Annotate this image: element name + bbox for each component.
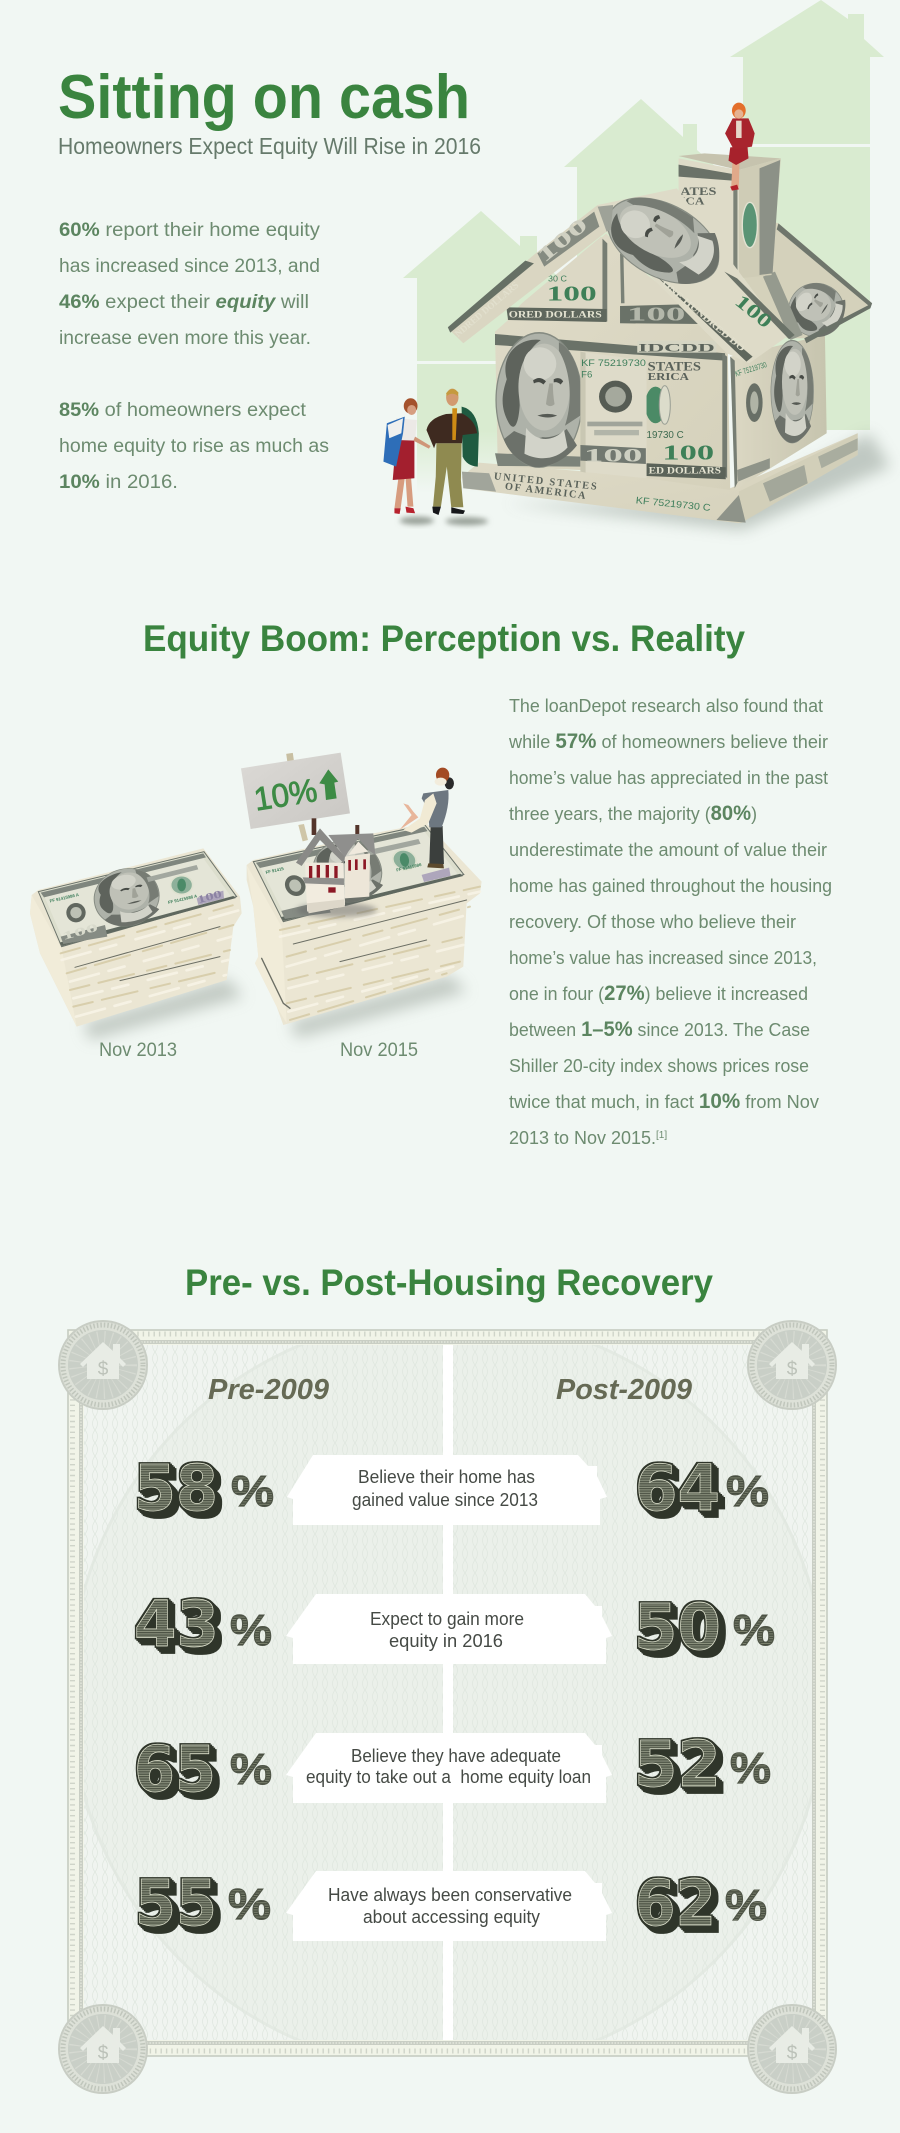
stat: post 62%: 62 — [635, 1867, 716, 1940]
text block: equity statistics: increase even more this year. — [59, 328, 311, 349]
sign: 10% up — [241, 753, 350, 841]
house front wall: 19730 C — [647, 430, 684, 441]
gable bills: 100 — [627, 304, 685, 326]
right roof slab with Franklin — [592, 180, 795, 363]
house front wall: STATES — [648, 360, 701, 374]
stat: post 50%: 50 — [634, 1591, 721, 1664]
stat: post 64%: % — [726, 1467, 769, 1516]
chimney: ICA — [680, 197, 705, 208]
house door bill: KF 75219730 — [581, 358, 646, 369]
stat: pre 58%: 58 — [134, 1452, 218, 1525]
stat: pre 55%: % — [228, 1880, 271, 1929]
corner medallion top left: $ — [98, 1359, 109, 1380]
row 1: gained value — [134, 1452, 769, 1525]
heading: pre vs post housing recovery: Pre- vs. Post-Housing Recovery — [185, 1262, 713, 1303]
text block: equity statistics: 85% of homeowners expect — [59, 400, 307, 421]
miniature house — [296, 818, 377, 917]
house front wall — [495, 233, 730, 490]
panel: certificate frame comparison — [59, 1315, 836, 2093]
corner medallion top right — [748, 1321, 836, 1409]
column heading: Pre-2009: Pre-2009 — [208, 1374, 329, 1406]
gable bills: 30 C — [548, 273, 568, 283]
stat: post 62% — [635, 1867, 767, 1940]
label tag — [286, 1594, 612, 1664]
stat: pre 55% — [135, 1867, 271, 1940]
text block: loanDepot research: Shiller 20-city index shows prices rose — [509, 1055, 809, 1076]
certificate border — [68, 1330, 827, 2056]
label tag: Have always been conservative — [328, 1885, 572, 1905]
text block: loanDepot research: 2013 to Nov 2015. — [509, 1127, 656, 1148]
sign: 10% up: 10% — [251, 771, 320, 818]
text block: equity statistics: 60% report their home equity — [59, 220, 321, 241]
corner medallion bottom left: $ — [98, 2043, 109, 2064]
illustration: Nov 2013 money stack — [30, 848, 243, 1040]
illustration: Nov 2013 money stack: FF 91415986 A — [167, 893, 199, 905]
stat: post 52% — [634, 1728, 771, 1801]
corner medallion bottom right — [748, 2005, 836, 2093]
row 3: adequate equity — [134, 1728, 771, 1806]
stat: post 52%: % — [730, 1744, 771, 1793]
illustration: Nov 2013 money stack: 100 — [196, 889, 223, 906]
text block: equity statistics: has increased since 2013, and — [59, 256, 320, 277]
text block: loanDepot research: home’s value has appreciated in the past — [509, 767, 828, 788]
stat: post 64% — [635, 1452, 769, 1525]
house side wall: KF 75219730 — [734, 360, 768, 379]
Franklin portrait on front wall — [496, 333, 582, 467]
illustration: Nov 2015 money stack with house, sign and couple: FF 91415 — [265, 866, 285, 875]
house door bill — [580, 352, 647, 478]
right roof slab with Franklin: 100 — [730, 291, 777, 333]
stat: pre 43% — [134, 1588, 272, 1661]
gable bills: 100 — [547, 282, 597, 306]
guilloche panel — [84, 1345, 812, 2040]
corner medallion bottom left — [59, 2005, 147, 2093]
label tag: about accessing equity — [363, 1907, 540, 1927]
text block: equity statistics: home equity to rise as much as — [59, 436, 329, 457]
label tag: equity to take out a home equity loan — [306, 1767, 591, 1787]
illustration: house made of dollar bills — [383, 103, 890, 530]
text block: loanDepot research: while 57% of homeowners believe their — [508, 730, 828, 753]
text block: loanDepot research: home’s value has increased since 2013, — [509, 947, 817, 968]
house base slab — [462, 433, 858, 523]
label tag: Expect to gain more — [370, 1609, 524, 1629]
row 4: conservative — [135, 1867, 767, 1941]
centre divider — [443, 1345, 453, 2040]
label tag: gained value since 2013 — [352, 1490, 538, 1510]
text block: loanDepot research: between 1–5% since 2013. The Case — [509, 1018, 810, 1041]
text block: loanDepot research: [1] — [656, 1130, 667, 1141]
stat: post 50%: % — [733, 1606, 775, 1655]
corner medallion bottom right: $ — [787, 2043, 798, 2064]
stat: pre 65% — [134, 1733, 272, 1806]
house door bill: F6 — [581, 369, 592, 380]
illustration: Nov 2015 money stack with house, sign and couple — [241, 753, 482, 1038]
house side wall — [730, 335, 827, 490]
title: Sitting on cash — [58, 63, 470, 132]
text block: loanDepot research: The loanDepot research also found that — [509, 695, 823, 716]
house base slab: OF AMERICA — [504, 481, 586, 502]
label tag: Believe their home has — [358, 1467, 535, 1487]
stat: pre 58%: % — [231, 1467, 274, 1516]
stat: pre 65%: 65 — [134, 1733, 216, 1806]
label tag — [287, 1455, 607, 1525]
figurine couple — [383, 389, 488, 525]
house front wall: 100 — [662, 441, 714, 464]
column heading: Post-2009: Post-2009 — [556, 1374, 692, 1406]
house front wall: IDCDD — [638, 342, 715, 354]
label tag: equity in 2016 — [389, 1631, 503, 1651]
stat: post 50% — [634, 1591, 775, 1664]
text block: loanDepot research: home has gained throughout the housing — [509, 875, 832, 896]
house door bill: 100 — [584, 445, 643, 467]
stat: pre 43%: 43 — [134, 1588, 219, 1661]
stat: pre 65%: % — [230, 1745, 272, 1794]
house front wall: ED DOLLARS — [649, 466, 721, 476]
text block: loanDepot research: recovery. Of those who believe their — [509, 911, 796, 932]
illustration: Nov 2013 money stack: FF 91415986 A — [49, 892, 80, 904]
illustration: Nov 2015 money stack with house, sign and couple: FF 91415986 — [396, 862, 423, 873]
text block: equity statistics: 10% in 2016. — [59, 472, 178, 493]
house base slab: KF 75219730 C — [635, 495, 711, 514]
figurine: woman on chimney — [725, 103, 755, 191]
stat: post 52%: 52 — [634, 1728, 721, 1801]
text block: loanDepot research: three years, the majority (80%) — [509, 802, 757, 825]
stat: pre 43%: % — [230, 1606, 272, 1655]
illustration: Nov 2013 money stack: 100 — [61, 922, 100, 943]
gable bills: ORED DOLLARS — [509, 309, 602, 319]
text block: equity statistics: 46% expect their equity will — [59, 292, 309, 313]
subtitle: Homeowners Expect Equity Will Rise in 2016 — [58, 133, 481, 159]
corner medallion top left — [59, 1321, 147, 1409]
text block: loanDepot research — [508, 695, 832, 1148]
left roof slab: 100 — [533, 214, 592, 267]
gable bills — [506, 237, 704, 326]
stat: pre 55%: 55 — [135, 1867, 217, 1940]
house base slab: UNITED STATES — [493, 471, 597, 493]
row 2: expect to gain — [134, 1588, 775, 1664]
corner medallion top right: $ — [787, 1359, 798, 1380]
stat: post 62%: % — [725, 1881, 767, 1930]
stat: pre 58% — [134, 1452, 274, 1525]
heading: equity boom: Equity Boom: Perception vs. Reality — [143, 618, 745, 659]
text block: loanDepot research: one in four (27%) believe it increased — [509, 982, 808, 1005]
text block: loanDepot research: twice that much, in fact 10% from Nov — [509, 1090, 820, 1113]
text block: equity statistics — [59, 220, 329, 493]
label tag — [286, 1733, 612, 1803]
left roof slab — [448, 205, 607, 343]
caption: Nov 2015: Nov 2015 — [340, 1040, 418, 1061]
chimney — [679, 153, 781, 278]
couple embracing — [400, 768, 454, 868]
stat: post 64%: 64 — [635, 1452, 720, 1525]
label tag — [286, 1871, 612, 1941]
caption: Nov 2013: Nov 2013 — [99, 1040, 177, 1061]
label tag: Believe they have adequate — [351, 1746, 561, 1766]
chimney: ATES — [680, 184, 717, 198]
right roof slab with Franklin: ONE HUNDRED DO — [660, 278, 747, 353]
left roof slab: NDRED DOLLARS — [453, 281, 521, 340]
hero: rising house arrows background — [403, 0, 884, 493]
house front wall: ERICA — [648, 371, 689, 383]
back roof — [680, 190, 872, 347]
text block: loanDepot research: underestimate the amount of value their — [509, 839, 827, 860]
